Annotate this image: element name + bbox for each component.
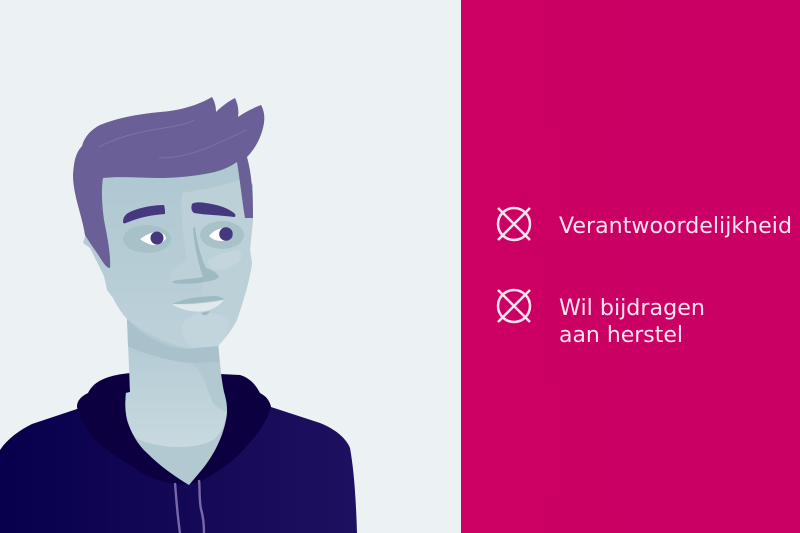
nose [173, 227, 219, 284]
label: Verantwoordelijkheid [559, 214, 792, 239]
under-eye shadows [123, 225, 171, 253]
mouth [172, 296, 225, 315]
cheek highlight [208, 250, 241, 270]
right eye [209, 227, 233, 241]
hood [77, 373, 271, 485]
neck [125, 318, 227, 485]
drawstrings [175, 480, 204, 533]
hair [73, 97, 264, 268]
item: Verantwoordelijkheid [498, 208, 792, 240]
panel: magenta [461, 0, 800, 533]
right eyebrow [191, 202, 235, 217]
label: Wil bijdragen [559, 296, 705, 321]
chin highlight [182, 313, 229, 348]
left eyebrow [123, 205, 165, 223]
hoodie body [0, 407, 357, 533]
illustration: young man [0, 97, 357, 533]
label: aan herstel [559, 323, 683, 348]
icon: crossed circle [498, 208, 530, 240]
left eye [140, 232, 166, 245]
icon: crossed circle [498, 290, 530, 322]
face [83, 160, 253, 348]
item: Wil bijdragen aan herstel [498, 290, 705, 348]
